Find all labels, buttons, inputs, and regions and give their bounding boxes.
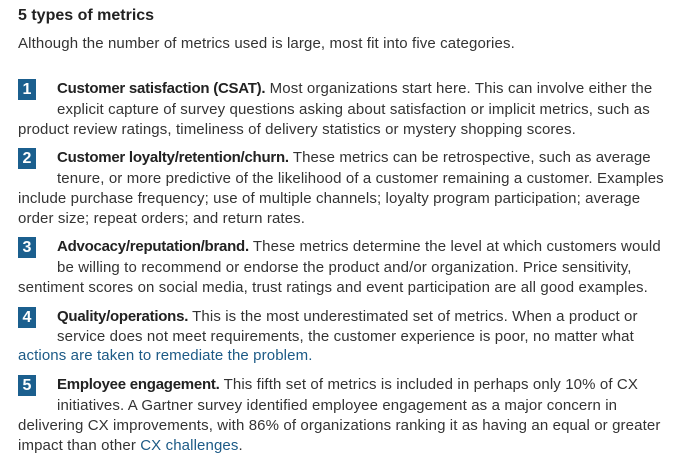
item 4: quality xyxy=(18,307,638,364)
number badge 2 xyxy=(18,148,36,169)
item 1: customer satisfaction xyxy=(18,79,652,138)
item 2: loyalty: order size; repeat orders; and return rates. xyxy=(18,210,305,227)
item 2: loyalty: Customer loyalty/retention/churn. These metrics can be retrospective, such as average xyxy=(57,149,651,166)
title: 5 types of metrics xyxy=(18,7,154,24)
item 1: customer satisfaction: product review ratings, timeliness of delivery statistics or mystery shopping scores. xyxy=(18,121,576,138)
item 1: customer satisfaction: Customer satisfaction (CSAT). Most organizations start here. This can involve either the xyxy=(57,80,652,97)
number badge 5: 5 xyxy=(23,377,31,394)
item 5: employee engagement: delivering CX improvements, with 86% of organizations ranking it as having an equal or greater xyxy=(18,417,660,434)
number badge 4 xyxy=(18,307,36,328)
number badge 3: 3 xyxy=(23,239,31,256)
item 4: quality: service does not meet requirements, the customer experience is poor, no matter what xyxy=(57,328,634,345)
item 2: loyalty xyxy=(18,148,664,227)
number badge 3 xyxy=(18,237,36,258)
item 5: employee engagement: initiatives. A Gartner survey identified employee engagement as a major concern in xyxy=(57,397,617,414)
item 5: employee engagement xyxy=(18,375,660,454)
item 4: quality: Quality/operations. This is the most underestimated set of metrics. When a product or xyxy=(57,308,638,325)
number badge 1 xyxy=(18,79,36,100)
item 3: advocacy: sentiment scores on social media, trust ratings and event participation are all good examples. xyxy=(18,279,648,296)
item 2: loyalty: include purchase frequency; use of multiple channels; loyalty program participation; average xyxy=(18,190,640,207)
item 3: advocacy: Advocacy/reputation/brand. These metrics determine the level at which customers would xyxy=(57,238,661,255)
item 3: advocacy: be willing to recommend or endorse the product and/or organization. Price sensitivity, xyxy=(57,259,632,276)
item 4: quality: actions are taken to remediate the problem. xyxy=(18,347,312,364)
item 3: advocacy xyxy=(18,237,661,296)
item 2: loyalty: tenure, or more predictive of the likelihood of a customer remaining a customer. Examples xyxy=(57,170,664,187)
item 5: employee engagement: impact than other CX challenges. xyxy=(18,437,243,454)
number badge 5 xyxy=(18,375,36,396)
number badge 1: 1 xyxy=(23,81,31,98)
intro text: Although the number of metrics used is large, most fit into five categories. xyxy=(18,35,515,52)
number badge 2: 2 xyxy=(23,150,31,167)
item 5: employee engagement: Employee engagement. This fifth set of metrics is included in perhaps only 10% of CX xyxy=(57,376,638,393)
number badge 4: 4 xyxy=(23,309,31,326)
item 1: customer satisfaction: explicit capture of survey questions asking about satisfaction or implicit metrics, such as xyxy=(57,101,650,118)
